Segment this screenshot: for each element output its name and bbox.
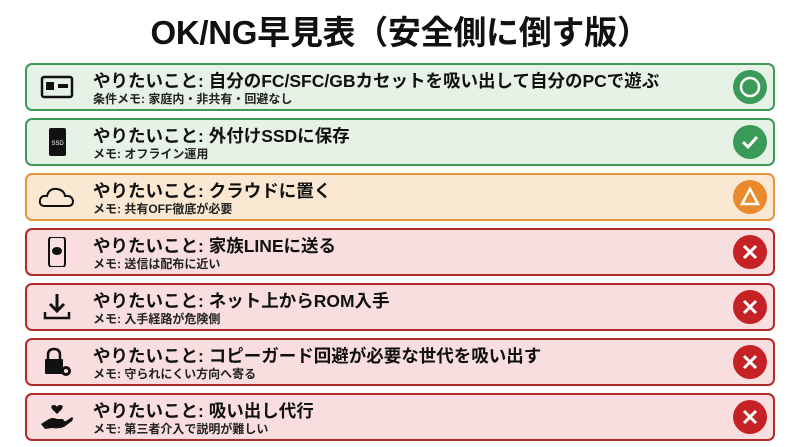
badge: triangle	[733, 180, 767, 214]
icon: phone	[48, 237, 66, 267]
badge: check	[733, 125, 767, 159]
row 2: SSD	[25, 118, 775, 166]
row 5: download: メモ: 入手経路が危険側	[93, 312, 220, 326]
row 6: lock	[25, 338, 775, 386]
row 3: cloud	[25, 173, 775, 221]
icon: hand heart	[41, 405, 73, 429]
icon: cloud	[38, 188, 74, 207]
icon: SSD: SSD	[51, 141, 64, 147]
row 5: download: やりたいこと: ネット上からROM入手	[93, 291, 390, 311]
icon: lock gear	[45, 348, 71, 376]
badge: X	[733, 290, 767, 324]
row 4: LINE: メモ: 送信は配布に近い	[93, 257, 220, 271]
badge: OK circle	[733, 70, 767, 104]
badge: X	[733, 400, 767, 434]
text: やりたいこと: 自分のFC/SFC/GBカセットを吸い出して自分のPCで遊ぶ	[93, 71, 659, 91]
icon: download	[44, 294, 70, 320]
icon: SSD	[49, 128, 66, 156]
row 7: hand heart	[25, 393, 775, 441]
row 3: cloud: やりたいこと: クラウドに置く	[93, 181, 331, 201]
row 2: SSD: メモ: オフライン運用	[93, 147, 208, 161]
row 7: hand heart: やりたいこと: 吸い出し代行	[93, 401, 314, 421]
row 2: SSD: やりたいこと: 外付けSSDに保存	[93, 126, 350, 146]
row 1: cartridge	[25, 63, 775, 111]
row 7: hand heart: メモ: 第三者介入で説明が難しい	[93, 422, 268, 436]
badge: X	[733, 235, 767, 269]
row 6: lock: メモ: 守られにくい方向へ寄る	[93, 367, 256, 381]
row 4: LINE	[25, 228, 775, 276]
title: OK/NG早見表（安全側に倒す版）	[150, 14, 650, 51]
badge: X	[733, 345, 767, 379]
icon: cartridge	[40, 76, 74, 98]
row 1: cartridge: 条件メモ: 家庭内・非共有・回避なし	[93, 92, 292, 106]
row 6: lock: やりたいこと: コピーガード回避が必要な世代を吸い出す	[93, 346, 541, 366]
row 5: download	[25, 283, 775, 331]
row 3: cloud: メモ: 共有OFF徹底が必要	[93, 202, 232, 216]
row 4: LINE: やりたいこと: 家族LINEに送る	[93, 236, 336, 256]
